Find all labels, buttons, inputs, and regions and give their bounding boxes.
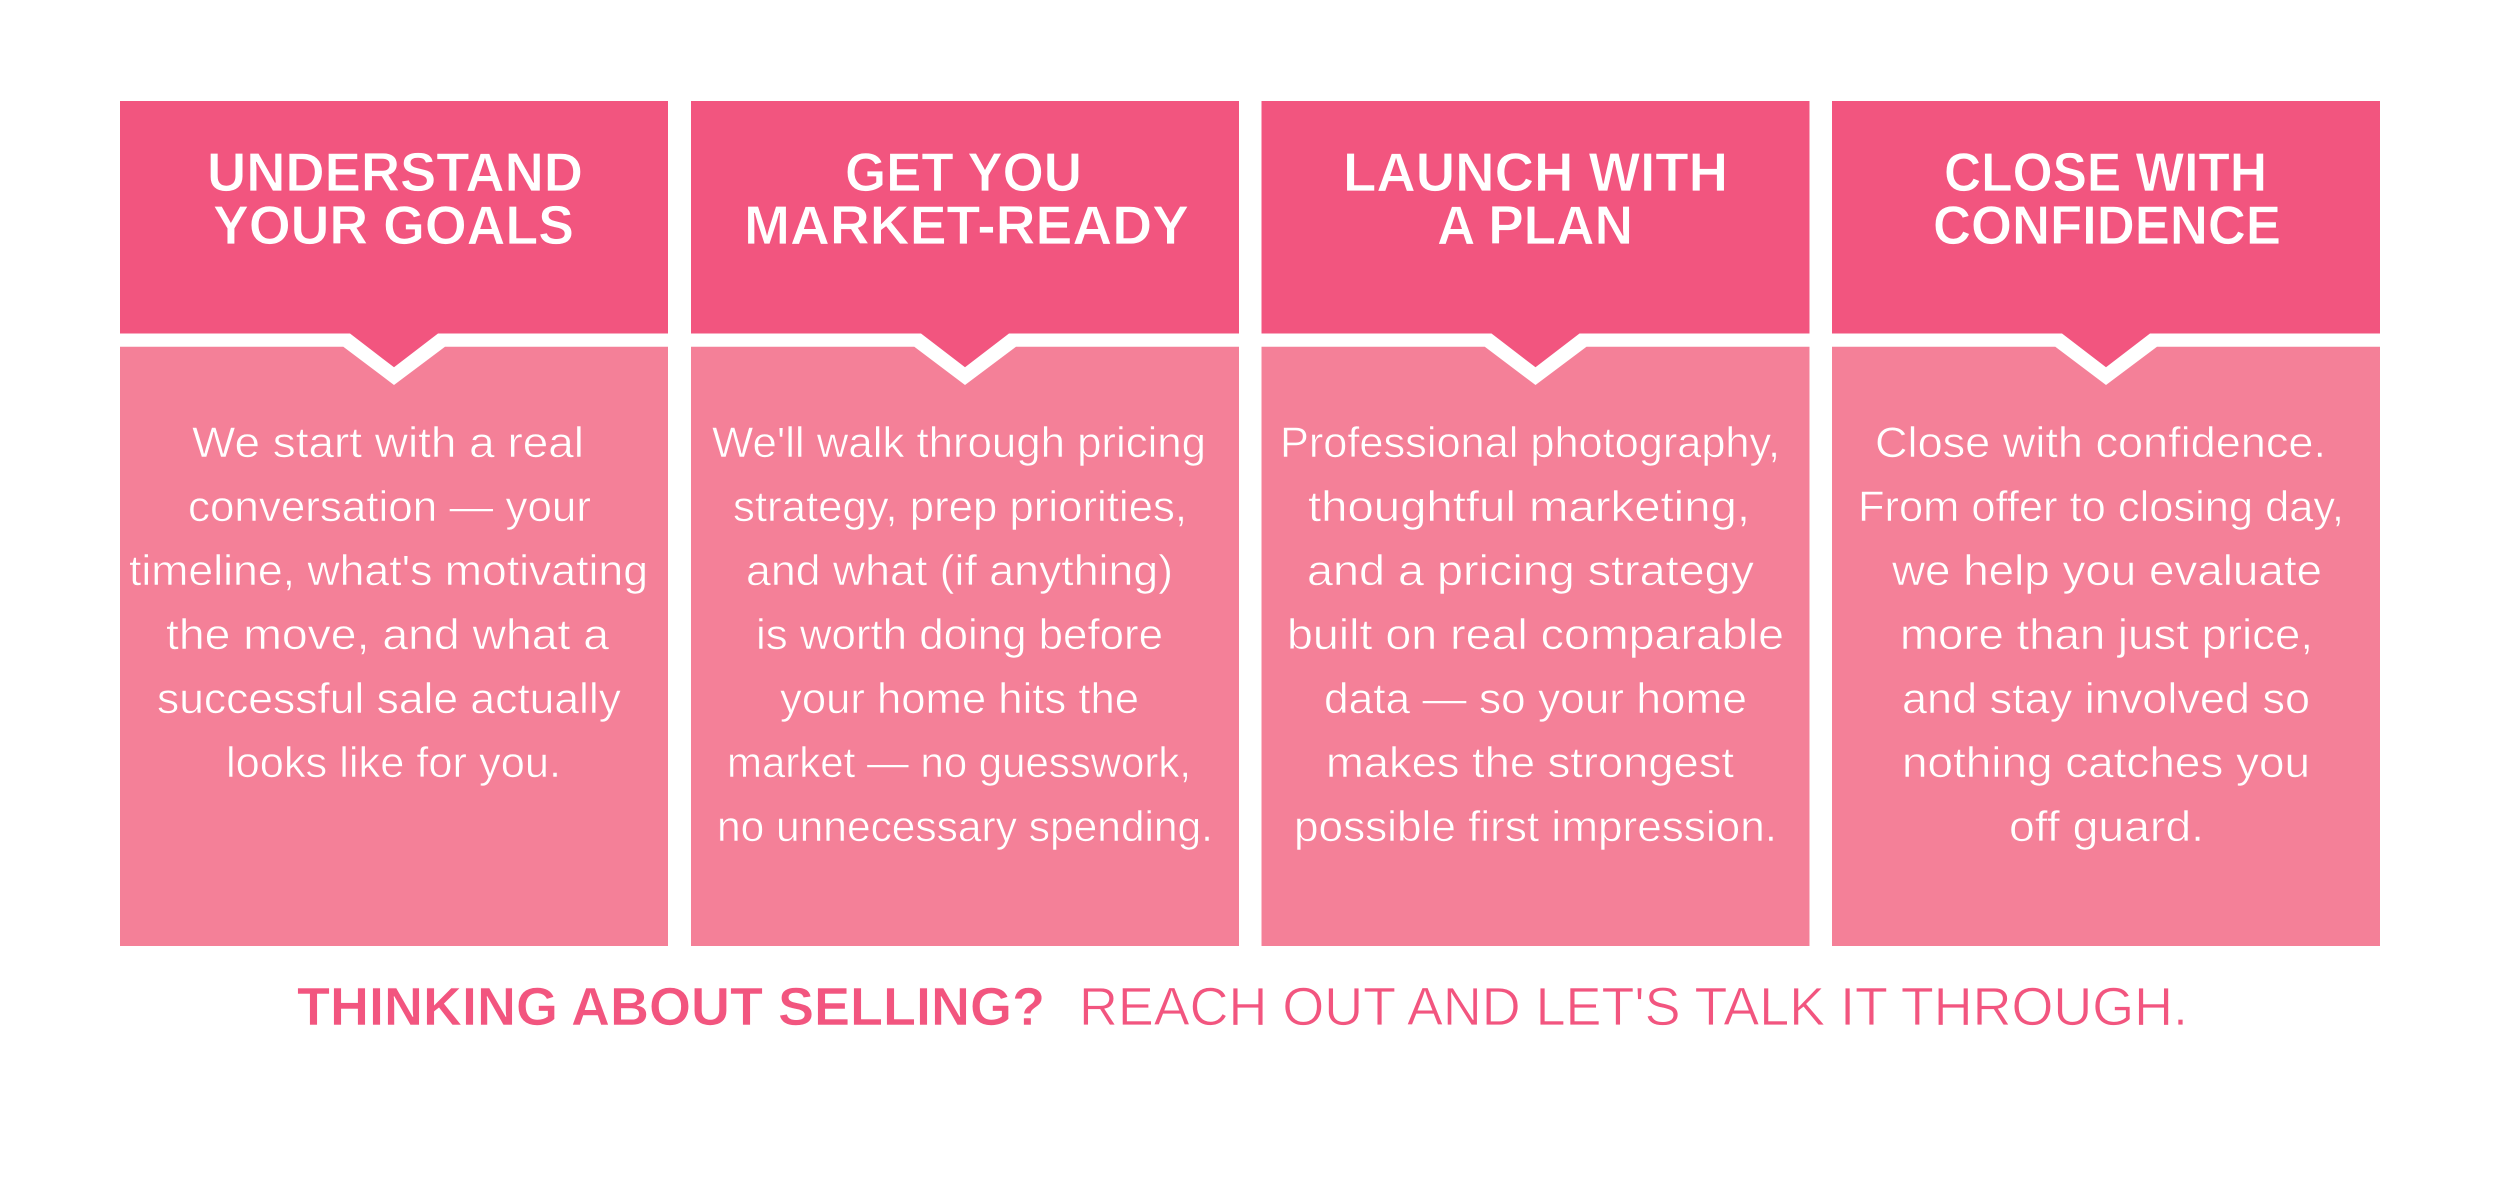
body text: the move, and what a — [166, 611, 609, 659]
body text: market — no guesswork, — [727, 739, 1191, 787]
body text: timeline, what's motivating — [129, 547, 648, 595]
body text: possible first impression. — [1294, 803, 1777, 851]
footer invitation: REACH OUT AND LET'S TALK IT THROUGH. — [1079, 977, 2188, 1037]
header box with pointer — [120, 101, 668, 367]
body text: makes the strongest — [1326, 739, 1734, 787]
body text — [1858, 419, 2344, 851]
heading: close with confidence — [1933, 141, 2281, 256]
header box with pointer — [1832, 101, 2380, 367]
heading: close with confidence: CONFIDENCE — [1933, 194, 2281, 256]
panel: get you market-ready — [691, 101, 1239, 946]
heading: get you market-ready: GET YOU — [845, 141, 1082, 203]
header box with pointer — [1262, 101, 1810, 367]
heading: launch with a plan: LAUNCH WITH — [1343, 141, 1728, 203]
heading: get you market-ready: MARKET-READY — [744, 194, 1189, 256]
heading: launch with a plan: A PLAN — [1437, 194, 1633, 256]
panel: launch with a plan — [1262, 101, 1810, 946]
body text: Close with confidence. — [1875, 419, 2326, 467]
body text: and a pricing strategy — [1307, 547, 1755, 595]
body box — [1832, 347, 2380, 946]
heading: launch with a plan — [1343, 141, 1728, 256]
body text: more than just price, — [1900, 611, 2313, 659]
body text: data — so your home — [1324, 675, 1747, 723]
body text: and what (if anything) — [746, 547, 1173, 595]
body text: We start with a real — [192, 419, 584, 467]
body text: looks like for you. — [226, 739, 561, 787]
body text: strategy, prep priorities, — [733, 483, 1187, 531]
body text: built on real comparable — [1287, 611, 1784, 659]
body text: is worth doing before — [756, 611, 1163, 659]
heading: understand your goals — [207, 141, 583, 256]
heading: understand your goals: UNDERSTAND — [207, 141, 583, 203]
body text: and stay involved so — [1902, 675, 2310, 723]
body text: We'll walk through pricing — [712, 419, 1206, 467]
body text: off guard. — [2009, 803, 2204, 851]
body text — [712, 419, 1213, 851]
body text: thoughtful marketing, — [1308, 483, 1750, 531]
footer call to action — [297, 977, 2188, 1037]
body text: Professional photography, — [1280, 419, 1780, 467]
body text — [129, 419, 648, 787]
heading: understand your goals: YOUR GOALS — [213, 194, 574, 256]
body text: conversation — your — [188, 483, 591, 531]
body box — [1262, 347, 1810, 946]
body box — [120, 347, 668, 946]
footer bold question: THINKING ABOUT SELLING? — [297, 977, 1045, 1037]
heading: get you market-ready — [744, 141, 1189, 256]
panel: close with confidence — [1832, 101, 2380, 946]
body text: nothing catches you — [1902, 739, 2310, 787]
body text: your home hits the — [780, 675, 1139, 723]
body text: From offer to closing day, — [1858, 483, 2344, 531]
body box — [691, 347, 1239, 946]
panel: understand your goals — [120, 101, 668, 946]
body text: successful sale actually — [157, 675, 622, 723]
header box with pointer — [691, 101, 1239, 367]
heading: close with confidence: CLOSE WITH — [1944, 141, 2267, 203]
body text: no unnecessary spending. — [717, 803, 1213, 851]
body text: we help you evaluate — [1891, 547, 2322, 595]
body text — [1280, 419, 1784, 851]
